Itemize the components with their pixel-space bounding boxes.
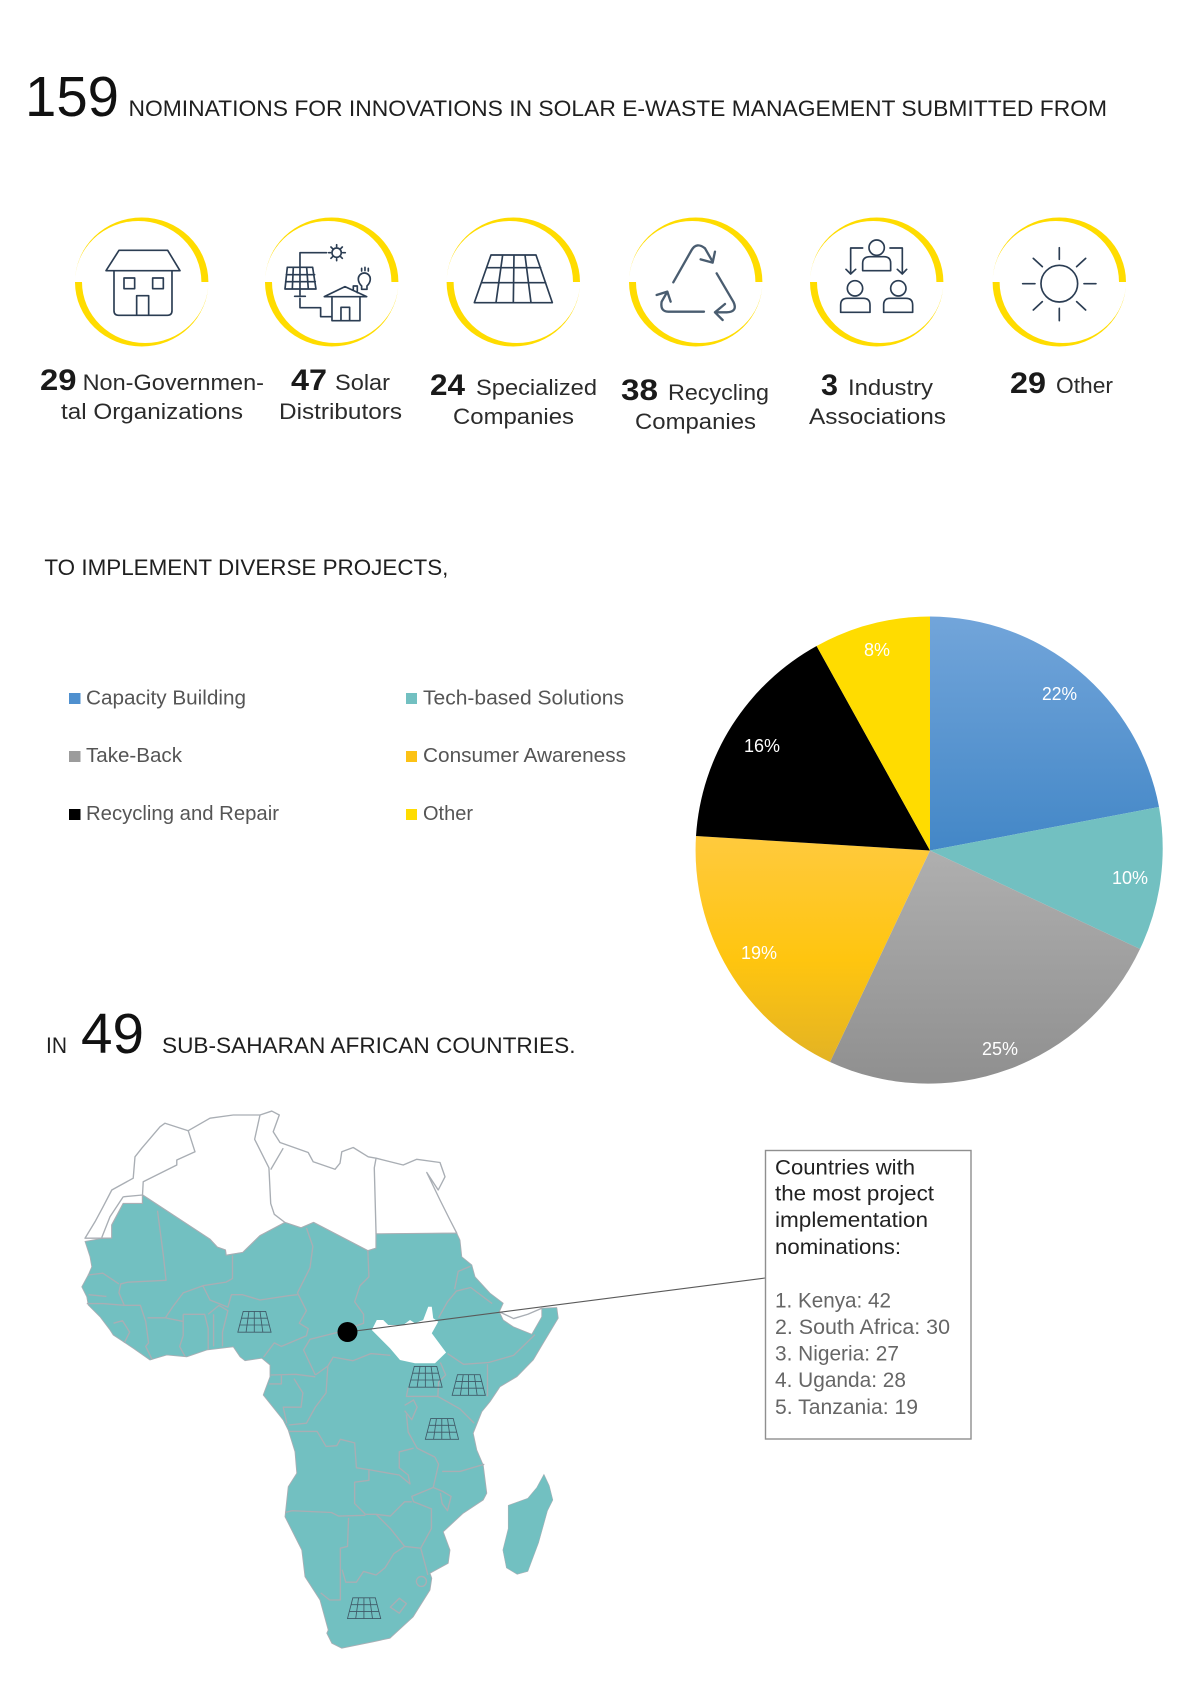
category: non-governmental organizations: tal Organizations xyxy=(61,399,243,424)
sub-Saharan region xyxy=(82,1195,558,1648)
callout: top countries: 4. Uganda: 28 xyxy=(775,1369,906,1392)
category: recycling companies: Recycling xyxy=(668,380,769,405)
map: Africa xyxy=(82,1111,558,1648)
category: specialized companies: Companies xyxy=(453,404,574,429)
category: solar distributors: 47 xyxy=(291,364,327,397)
heading: 49 countries: 49 xyxy=(81,1002,144,1066)
category: recycling companies xyxy=(621,218,769,434)
pie chart: project shares: 10% xyxy=(1112,867,1148,888)
callout: top countries: Countries with xyxy=(775,1156,915,1179)
category: industry associations: 3 xyxy=(821,369,838,402)
title: 159 nominations xyxy=(25,65,1107,129)
category: recycling companies: Companies xyxy=(635,409,756,434)
category: non-governmental organizations xyxy=(40,218,264,424)
category: specialized companies xyxy=(430,218,597,429)
Madagascar xyxy=(503,1474,553,1574)
category: specialized companies: 24 xyxy=(430,369,465,402)
north Africa borders xyxy=(102,1115,376,1237)
Gulf of Aden coastline xyxy=(499,1308,542,1319)
heading: 49 countries: IN xyxy=(46,1033,67,1058)
category: recycling companies: 38 xyxy=(621,374,658,407)
category: non-governmental organizations: Non-Governmen- xyxy=(83,370,264,395)
category: industry associations: Associations xyxy=(809,404,946,429)
panel: nominator categories xyxy=(40,218,1126,434)
legend: project types: Consumer Awareness xyxy=(423,744,626,767)
map marker dot xyxy=(338,1322,358,1342)
heading: 49 countries xyxy=(46,1002,576,1066)
solar panel: Nigeria xyxy=(238,1311,271,1332)
category: specialized companies: Specialized xyxy=(476,375,597,400)
callout: top countries: 1. Kenya: 42 xyxy=(775,1290,891,1313)
category: other: Other xyxy=(1056,373,1113,398)
category: other xyxy=(993,218,1126,400)
solar panel: Tanzania xyxy=(425,1419,459,1439)
pie chart: project shares: 25% xyxy=(982,1038,1018,1059)
pie chart: project shares: 19% xyxy=(741,942,777,963)
pie chart: project shares: 8% xyxy=(864,639,890,660)
category: solar distributors xyxy=(265,218,402,424)
callout: top countries: the most project xyxy=(775,1183,934,1206)
category: industry associations xyxy=(809,218,946,429)
legend: project types: Take-Back xyxy=(86,744,183,767)
legend: project types xyxy=(69,686,626,825)
leader line xyxy=(348,1278,765,1332)
pie chart: project shares xyxy=(696,616,1163,1084)
pie chart: project shares: 16% xyxy=(744,735,780,756)
solar panel: Uganda xyxy=(409,1366,442,1387)
South Sudan gap xyxy=(372,1307,446,1363)
legend: project types: Tech-based Solutions xyxy=(423,686,624,710)
callout: top countries: implementation xyxy=(775,1209,928,1232)
category: solar distributors: Solar xyxy=(335,370,390,395)
legend: project types: Recycling and Repair xyxy=(86,802,279,825)
callout: top countries xyxy=(766,1150,971,1439)
solar panel: Kenya xyxy=(452,1375,485,1395)
callout: top countries: nominations: xyxy=(775,1236,901,1259)
callout: top countries: 2. South Africa: 30 xyxy=(775,1316,950,1339)
category: non-governmental organizations: 29 xyxy=(40,364,76,397)
legend: project types: Capacity Building xyxy=(86,686,246,710)
country borders xyxy=(87,1211,535,1613)
category: other: 29 xyxy=(1010,367,1046,400)
heading: 49 countries: SUB-SAHARAN AFRICAN COUNTRIES. xyxy=(162,1033,576,1058)
title: 159 nominations: NOMINATIONS FOR INNOVATIONS IN SOLAR E-WASTE MANAGEMENT SUBMITTED FROM xyxy=(128,96,1107,121)
solar panel: South Africa xyxy=(347,1598,381,1619)
pie chart: project shares: 22% xyxy=(1042,683,1077,704)
Eswatini xyxy=(416,1576,426,1586)
north Africa outline xyxy=(85,1111,457,1255)
title: 159 nominations: 159 xyxy=(25,65,119,129)
category: solar distributors: Distributors xyxy=(279,399,402,424)
legend: project types: Other xyxy=(423,802,473,825)
callout: top countries: 3. Nigeria: 27 xyxy=(775,1343,899,1366)
callout: top countries: 5. Tanzania: 19 xyxy=(775,1396,918,1419)
heading: diverse projects: TO IMPLEMENT DIVERSE PROJECTS, xyxy=(44,555,448,580)
category: industry associations: Industry xyxy=(848,375,933,400)
